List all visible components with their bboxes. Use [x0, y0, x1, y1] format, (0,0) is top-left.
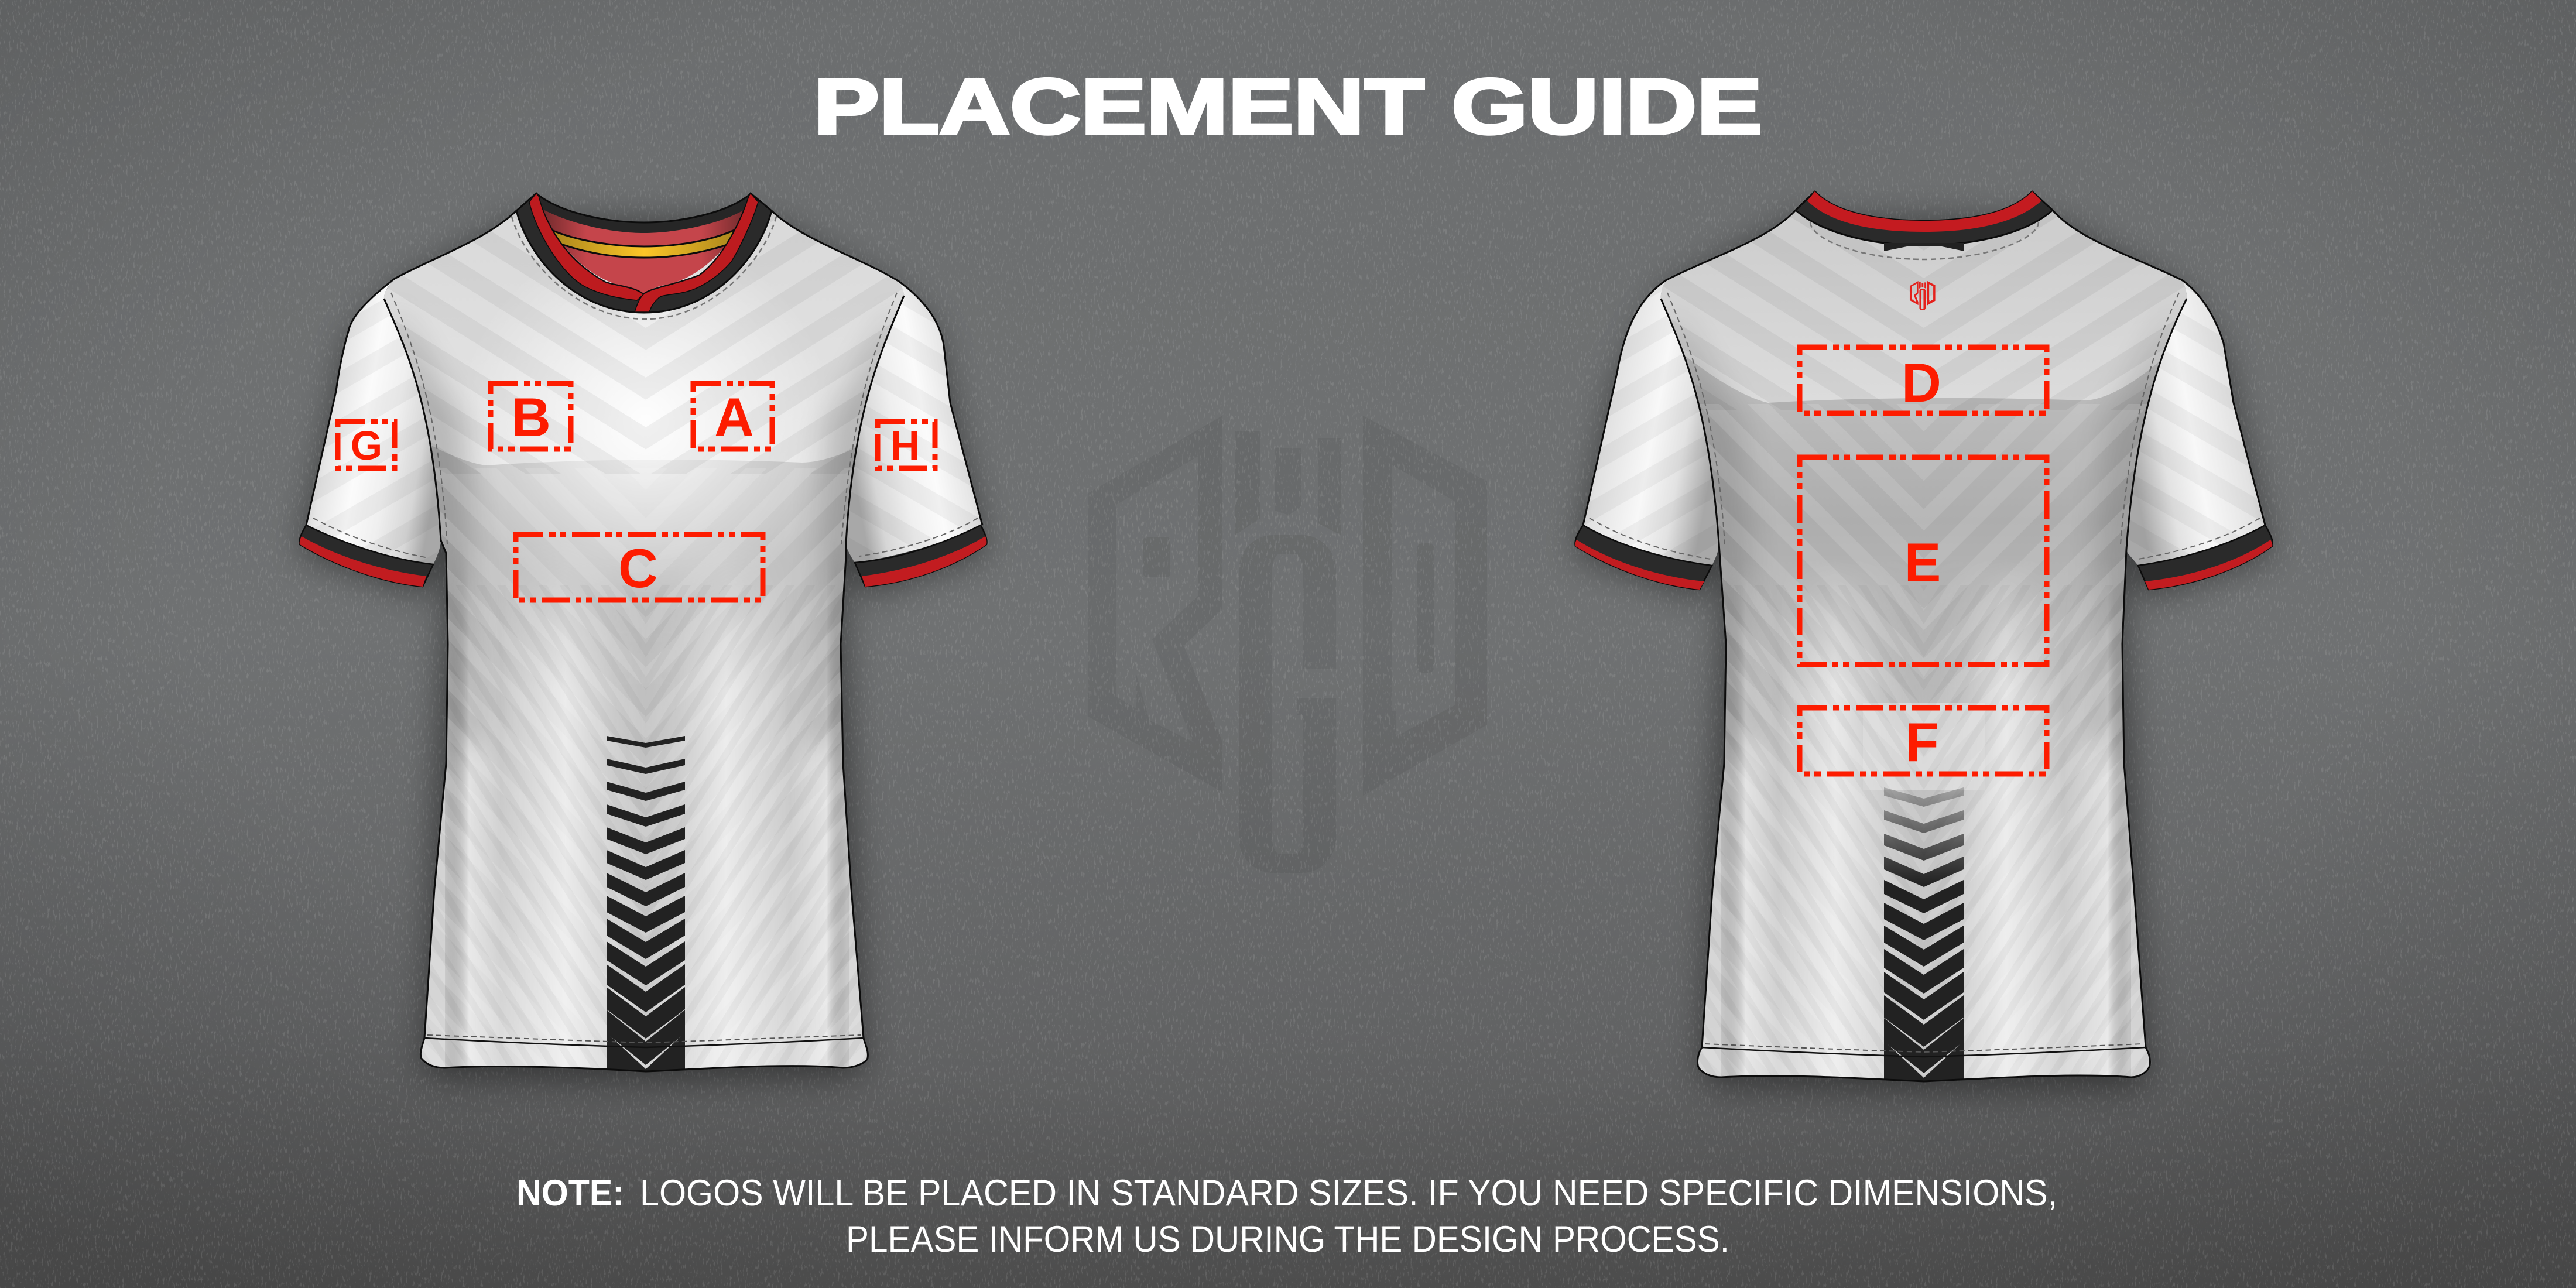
back hem chevrons — [1884, 787, 1964, 1101]
front body — [375, 199, 919, 1094]
zone G — [338, 422, 395, 468]
letter A: A — [714, 386, 754, 448]
front collar — [516, 193, 772, 313]
letter E: E — [1904, 532, 1941, 593]
shirt shadows — [300, 220, 2272, 1091]
back sleeve cuffs — [1575, 525, 2273, 590]
zone letters — [351, 352, 1941, 773]
zone D — [1800, 347, 2047, 413]
back collar — [1796, 191, 2053, 251]
letter C: C — [618, 537, 658, 599]
letter F: F — [1905, 711, 1939, 773]
zone E — [1800, 457, 2047, 664]
front left sleeve — [307, 282, 441, 564]
front right sleeve — [847, 283, 982, 562]
note line one: LOGOS WILL BE PLACED IN STANDARD SIZES. IF YOU NEED SPECIFIC DIMENSIONS, — [640, 1173, 2057, 1214]
back outlines and stitching — [1583, 210, 2265, 1081]
back left sleeve — [1569, 269, 1727, 574]
note text — [516, 1173, 2057, 1260]
neck tape tab — [1884, 243, 1964, 251]
front hem chevrons — [607, 736, 685, 1094]
front jersey — [293, 193, 995, 1094]
watermark logo — [1088, 416, 1487, 873]
letter B: B — [511, 386, 551, 448]
back body — [1651, 199, 2197, 1101]
placement zones — [338, 347, 2047, 774]
letter G: G — [351, 423, 382, 468]
front outlines and stitching — [306, 211, 982, 1071]
note label: NOTE: — [516, 1173, 624, 1214]
zone A — [693, 383, 772, 449]
letter D: D — [1902, 352, 1941, 413]
front sleeve cuffs — [299, 525, 987, 587]
letter H: H — [890, 423, 920, 468]
title: PLACEMENT GUIDE — [814, 63, 1762, 150]
zone F — [1800, 708, 2047, 774]
note line two: PLEASE INFORM US DURING THE DESIGN PROCESS. — [846, 1219, 1729, 1260]
back neck logo — [1910, 281, 1936, 310]
zone H — [878, 422, 935, 468]
back right sleeve — [2119, 269, 2277, 574]
back jersey — [1569, 191, 2277, 1101]
zone B — [491, 383, 571, 449]
zone C — [516, 535, 763, 600]
